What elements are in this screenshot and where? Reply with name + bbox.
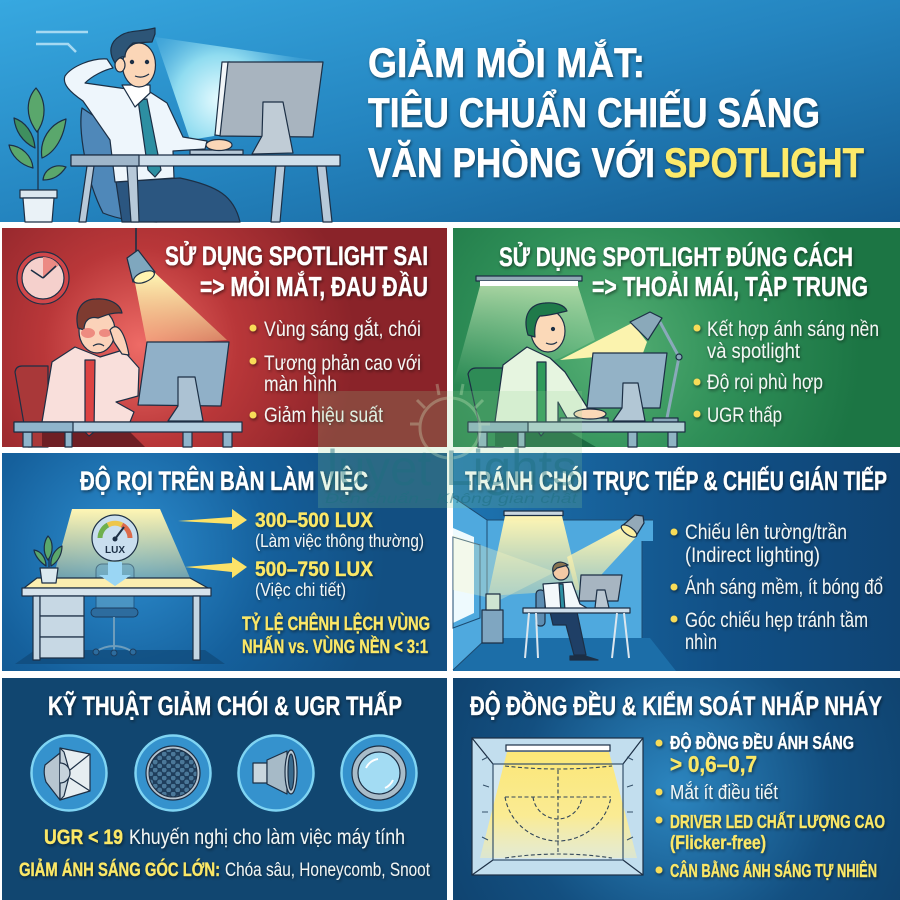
lux values: (Làm việc thông thường) bbox=[255, 531, 424, 551]
list: glare tips: Chiếu lên tường/trần bbox=[685, 521, 847, 544]
list: wrong use effects: màn hình bbox=[264, 373, 337, 396]
list: uniformity items: > 0,6–0,7 bbox=[670, 751, 757, 777]
lux values: 300–500 LUX bbox=[255, 509, 373, 532]
diagram: room light distribution bbox=[472, 738, 643, 875]
heading: illuminance: ĐỘ RỌI TRÊN BÀN LÀM VIỆC bbox=[80, 465, 368, 496]
title bbox=[368, 38, 864, 186]
heading: techniques: KỸ THUẬT GIẢM CHÓI & UGR THẤP bbox=[48, 689, 402, 721]
illustration: desk bbox=[14, 422, 242, 447]
illustration: light beams bbox=[453, 516, 637, 600]
watermark: Đèn chuẩn - Không gian chất bbox=[325, 490, 579, 506]
icon: snoot bbox=[238, 736, 314, 810]
list: correct use benefits: Độ rọi phù hợp bbox=[707, 371, 823, 394]
heading: wrong use: => MỎI MẮT, ĐAU ĐẦU bbox=[200, 270, 428, 302]
title: GIẢM MỎI MẮT: bbox=[368, 38, 645, 86]
illustration: ceiling fixture bbox=[504, 511, 563, 516]
icon: honeycomb bbox=[136, 736, 210, 810]
icon: wall clock bbox=[17, 252, 69, 304]
list: glare tips: nhìn bbox=[685, 631, 717, 654]
list: wrong use effects: Vùng sáng gắt, chói bbox=[264, 318, 421, 341]
illustration: shirt bbox=[495, 347, 604, 422]
illustration: hand and keyboard bbox=[190, 140, 243, 154]
panel: glare reduction techniques bbox=[2, 678, 447, 900]
list: wrong use effects bbox=[250, 318, 421, 427]
illustration: desk bbox=[468, 422, 685, 447]
list: wrong use effects: Giảm hiệu suất bbox=[264, 404, 383, 427]
illustration: chair bbox=[81, 108, 157, 222]
UGR recommendation: UGR < 19 bbox=[44, 826, 123, 849]
illustration: head bbox=[111, 28, 156, 107]
illustration: shirt bbox=[42, 347, 139, 422]
illustration: trousers bbox=[42, 432, 145, 447]
panel: avoid direct glare bbox=[453, 453, 900, 671]
icon: lux gauge: LUX bbox=[105, 545, 125, 556]
heading: wrong use bbox=[165, 239, 428, 302]
icon: lens bbox=[342, 736, 416, 810]
illustration: hands on keyboard bbox=[560, 409, 608, 422]
arrow: to 300-500 lux bbox=[178, 509, 247, 530]
illustration: monitor bbox=[215, 62, 323, 154]
heading: correct use bbox=[499, 240, 868, 302]
illustration: chair bbox=[468, 368, 503, 447]
illustration: office chair bbox=[91, 564, 138, 656]
illustration: plant bbox=[9, 88, 66, 222]
illustration: trousers bbox=[495, 432, 596, 447]
title: TIÊU CHUẨN CHIẾU SÁNG bbox=[368, 88, 820, 136]
lux values: 500–750 LUX bbox=[255, 558, 373, 581]
panel: desk illuminance bbox=[2, 453, 447, 671]
illustration: head bbox=[526, 303, 567, 352]
illustration: shirt and arm bbox=[64, 59, 207, 182]
illustration: ceiling fixture bbox=[476, 276, 582, 286]
illustration: floor shadow bbox=[15, 650, 225, 664]
illustration: small worker bbox=[536, 562, 598, 660]
UGR recommendation bbox=[44, 826, 405, 849]
illustration: task lamp beam bbox=[560, 323, 647, 360]
lux values: (Việc chi tiết) bbox=[255, 580, 346, 600]
icon: down arrow bbox=[99, 562, 131, 586]
icon: plant bbox=[34, 536, 62, 583]
watermark: luyet Lights bbox=[327, 440, 577, 496]
icon: deep reflector bbox=[32, 736, 106, 810]
contrast ratio note: TỶ LỆ CHÊNH LỆCH VÙNG bbox=[242, 613, 430, 635]
illustration: trousers bbox=[116, 178, 240, 222]
list: uniformity items bbox=[656, 732, 885, 881]
panel: wrong spotlight use bbox=[2, 228, 447, 447]
list: correct use benefits bbox=[694, 318, 879, 427]
illustration: tie bbox=[138, 99, 161, 177]
wide-angle light reduction: GIẢM ÁNH SÁNG GÓC LỚN: bbox=[19, 859, 220, 881]
list: uniformity items: ĐỘ ĐỒNG ĐỀU ÁNH SÁNG bbox=[670, 732, 854, 753]
illustration: monitor bbox=[138, 342, 229, 421]
illustration: room walls bbox=[453, 497, 676, 671]
illustration: monitor bbox=[587, 353, 667, 421]
illustration: tie bbox=[537, 362, 546, 436]
panel: correct spotlight use bbox=[453, 228, 900, 447]
heading: wrong use: SỬ DỤNG SPOTLIGHT SAI bbox=[165, 239, 428, 271]
lux values bbox=[255, 509, 424, 600]
panel: uniformity and flicker control bbox=[453, 678, 900, 900]
illustration: desk bbox=[22, 578, 211, 660]
panel: header bbox=[0, 0, 900, 222]
illustration: spotlight beam bbox=[135, 273, 227, 345]
illustration: small desk and monitor bbox=[523, 575, 630, 658]
title: VĂN PHÒNG VỚI bbox=[368, 138, 655, 186]
icon: decorative light streaks bbox=[36, 32, 88, 52]
list: correct use benefits: và spotlight bbox=[707, 340, 800, 363]
list: uniformity items: (Flicker-free) bbox=[670, 833, 766, 854]
contrast ratio note bbox=[242, 613, 430, 658]
illustration: monitor light beam bbox=[155, 37, 320, 140]
illustration: task lamp bbox=[630, 312, 682, 422]
contrast ratio note: NHẤN vs. VÙNG NỀN < 3:1 bbox=[242, 636, 428, 658]
icon: lux gauge bbox=[92, 515, 138, 561]
wide-angle light reduction bbox=[19, 859, 431, 881]
wide-angle light reduction: Chóa sâu, Honeycomb, Snoot bbox=[225, 860, 431, 881]
list: uniformity items: Mắt ít điều tiết bbox=[670, 781, 778, 804]
arrow: to 500-750 lux bbox=[185, 557, 247, 578]
UGR recommendation: Khuyến nghị cho làm việc máy tính bbox=[129, 826, 405, 849]
illustration: light cone bbox=[53, 509, 190, 578]
illustration: ceiling lamp bbox=[127, 228, 156, 286]
illustration: head and raised hand bbox=[77, 299, 129, 355]
illustration: chair bbox=[15, 366, 48, 447]
list: glare tips: (Indirect lighting) bbox=[685, 544, 820, 567]
illustration: tie bbox=[85, 360, 95, 436]
illustration: wall lamp bbox=[619, 515, 644, 539]
illustration: ambient light bbox=[453, 286, 595, 385]
list: glare tips bbox=[670, 521, 883, 654]
watermark bbox=[318, 384, 582, 508]
illustration: filing cabinet bbox=[482, 594, 503, 643]
list: wrong use effects: Tương phản cao với bbox=[264, 352, 421, 375]
title: SPOTLIGHT bbox=[664, 139, 864, 186]
illustration: desk bbox=[71, 155, 340, 222]
list: correct use benefits: UGR thấp bbox=[707, 404, 782, 427]
